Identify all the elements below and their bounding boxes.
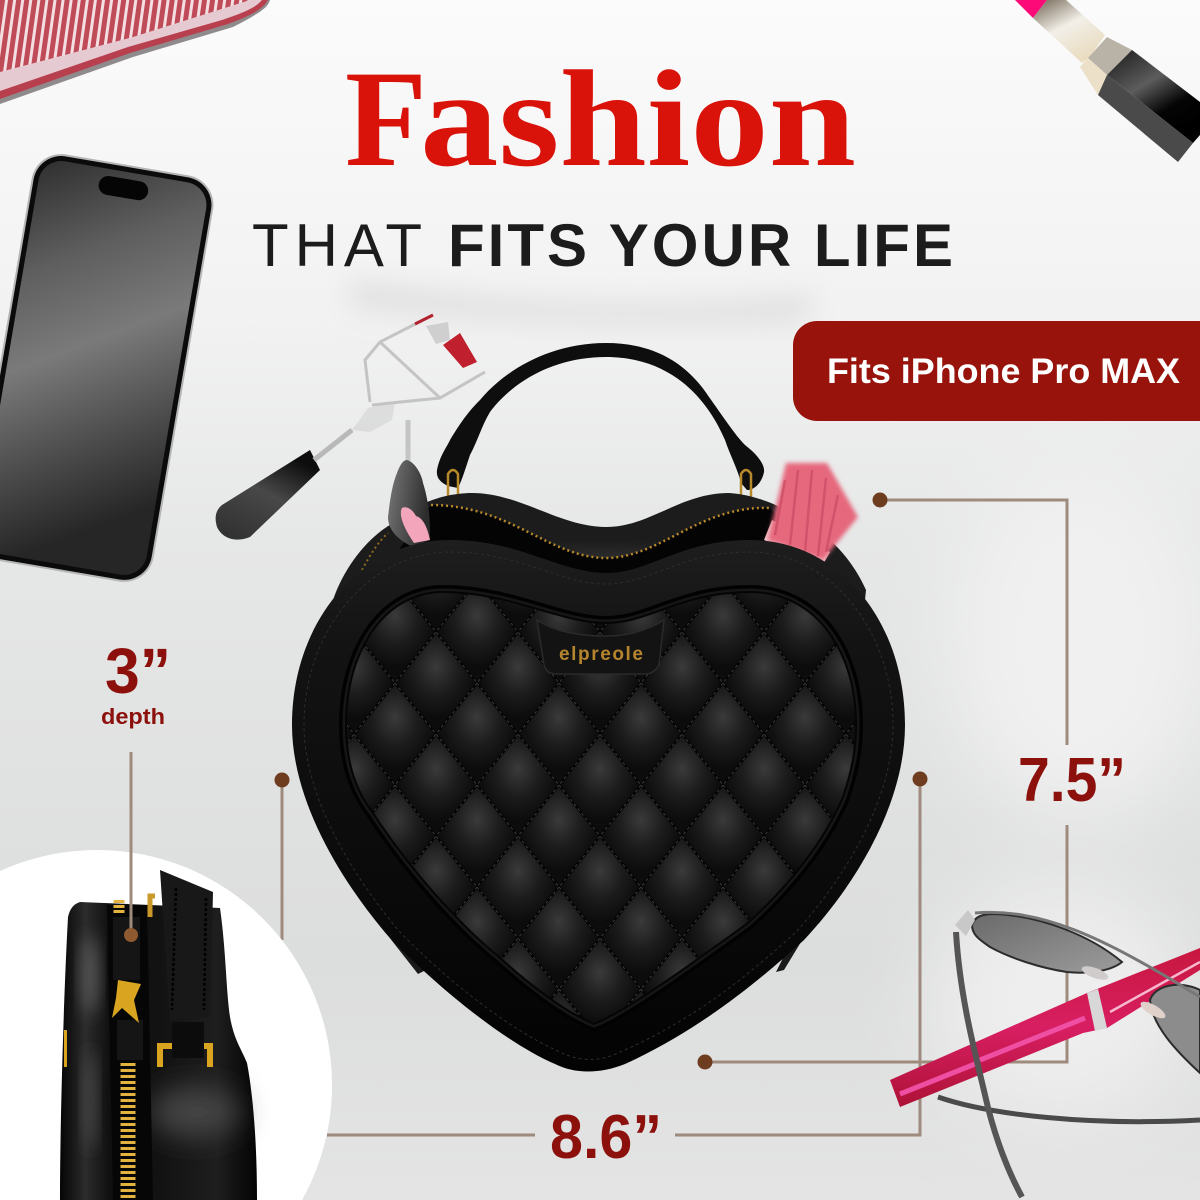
- title: Fashion: ashion: [420, 42, 856, 195]
- white circle inset with side view of bag: [0, 752, 332, 1200]
- subtitle: that fits your life: FITS YOUR LIFE: [448, 212, 953, 279]
- brand tab: elpreole: [559, 644, 643, 665]
- comb top left: [0, 0, 270, 104]
- quilted panel: [346, 592, 856, 1024]
- depth label: depth: [101, 704, 165, 729]
- title: Fashion: F: [345, 42, 427, 195]
- lipstick top right: [1015, 0, 1200, 162]
- sunglasses and pen: [890, 910, 1200, 1197]
- bag opening with zipper: [362, 505, 850, 590]
- subtitle: that fits your life: THAT: [252, 212, 422, 279]
- dimension width line and label 8.6: 8.6”: [550, 1103, 662, 1172]
- makeup brush: [764, 463, 858, 566]
- badge: fits iPhone Pro MAX: Fits iPhone Pro MAX: [827, 352, 1181, 391]
- rear bag panel: [333, 493, 866, 650]
- eyelash curler: [216, 315, 485, 547]
- phone: [0, 149, 218, 587]
- bag handle: [437, 343, 764, 498]
- heart rim stitching and groove: [304, 552, 893, 1060]
- depth label: 3”: [105, 635, 171, 707]
- dimension height line and label 7.5: [698, 492, 1126, 1070]
- brand tab: [537, 620, 664, 674]
- dimension height line and label 7.5: 7.5”: [1018, 746, 1126, 815]
- dimension width line and label 8.6: [274, 772, 928, 1172]
- strap tabs: [389, 932, 804, 974]
- handbag: [216, 315, 905, 1072]
- heart body front: [292, 540, 905, 1072]
- badge: fits iPhone Pro MAX: [793, 321, 1200, 421]
